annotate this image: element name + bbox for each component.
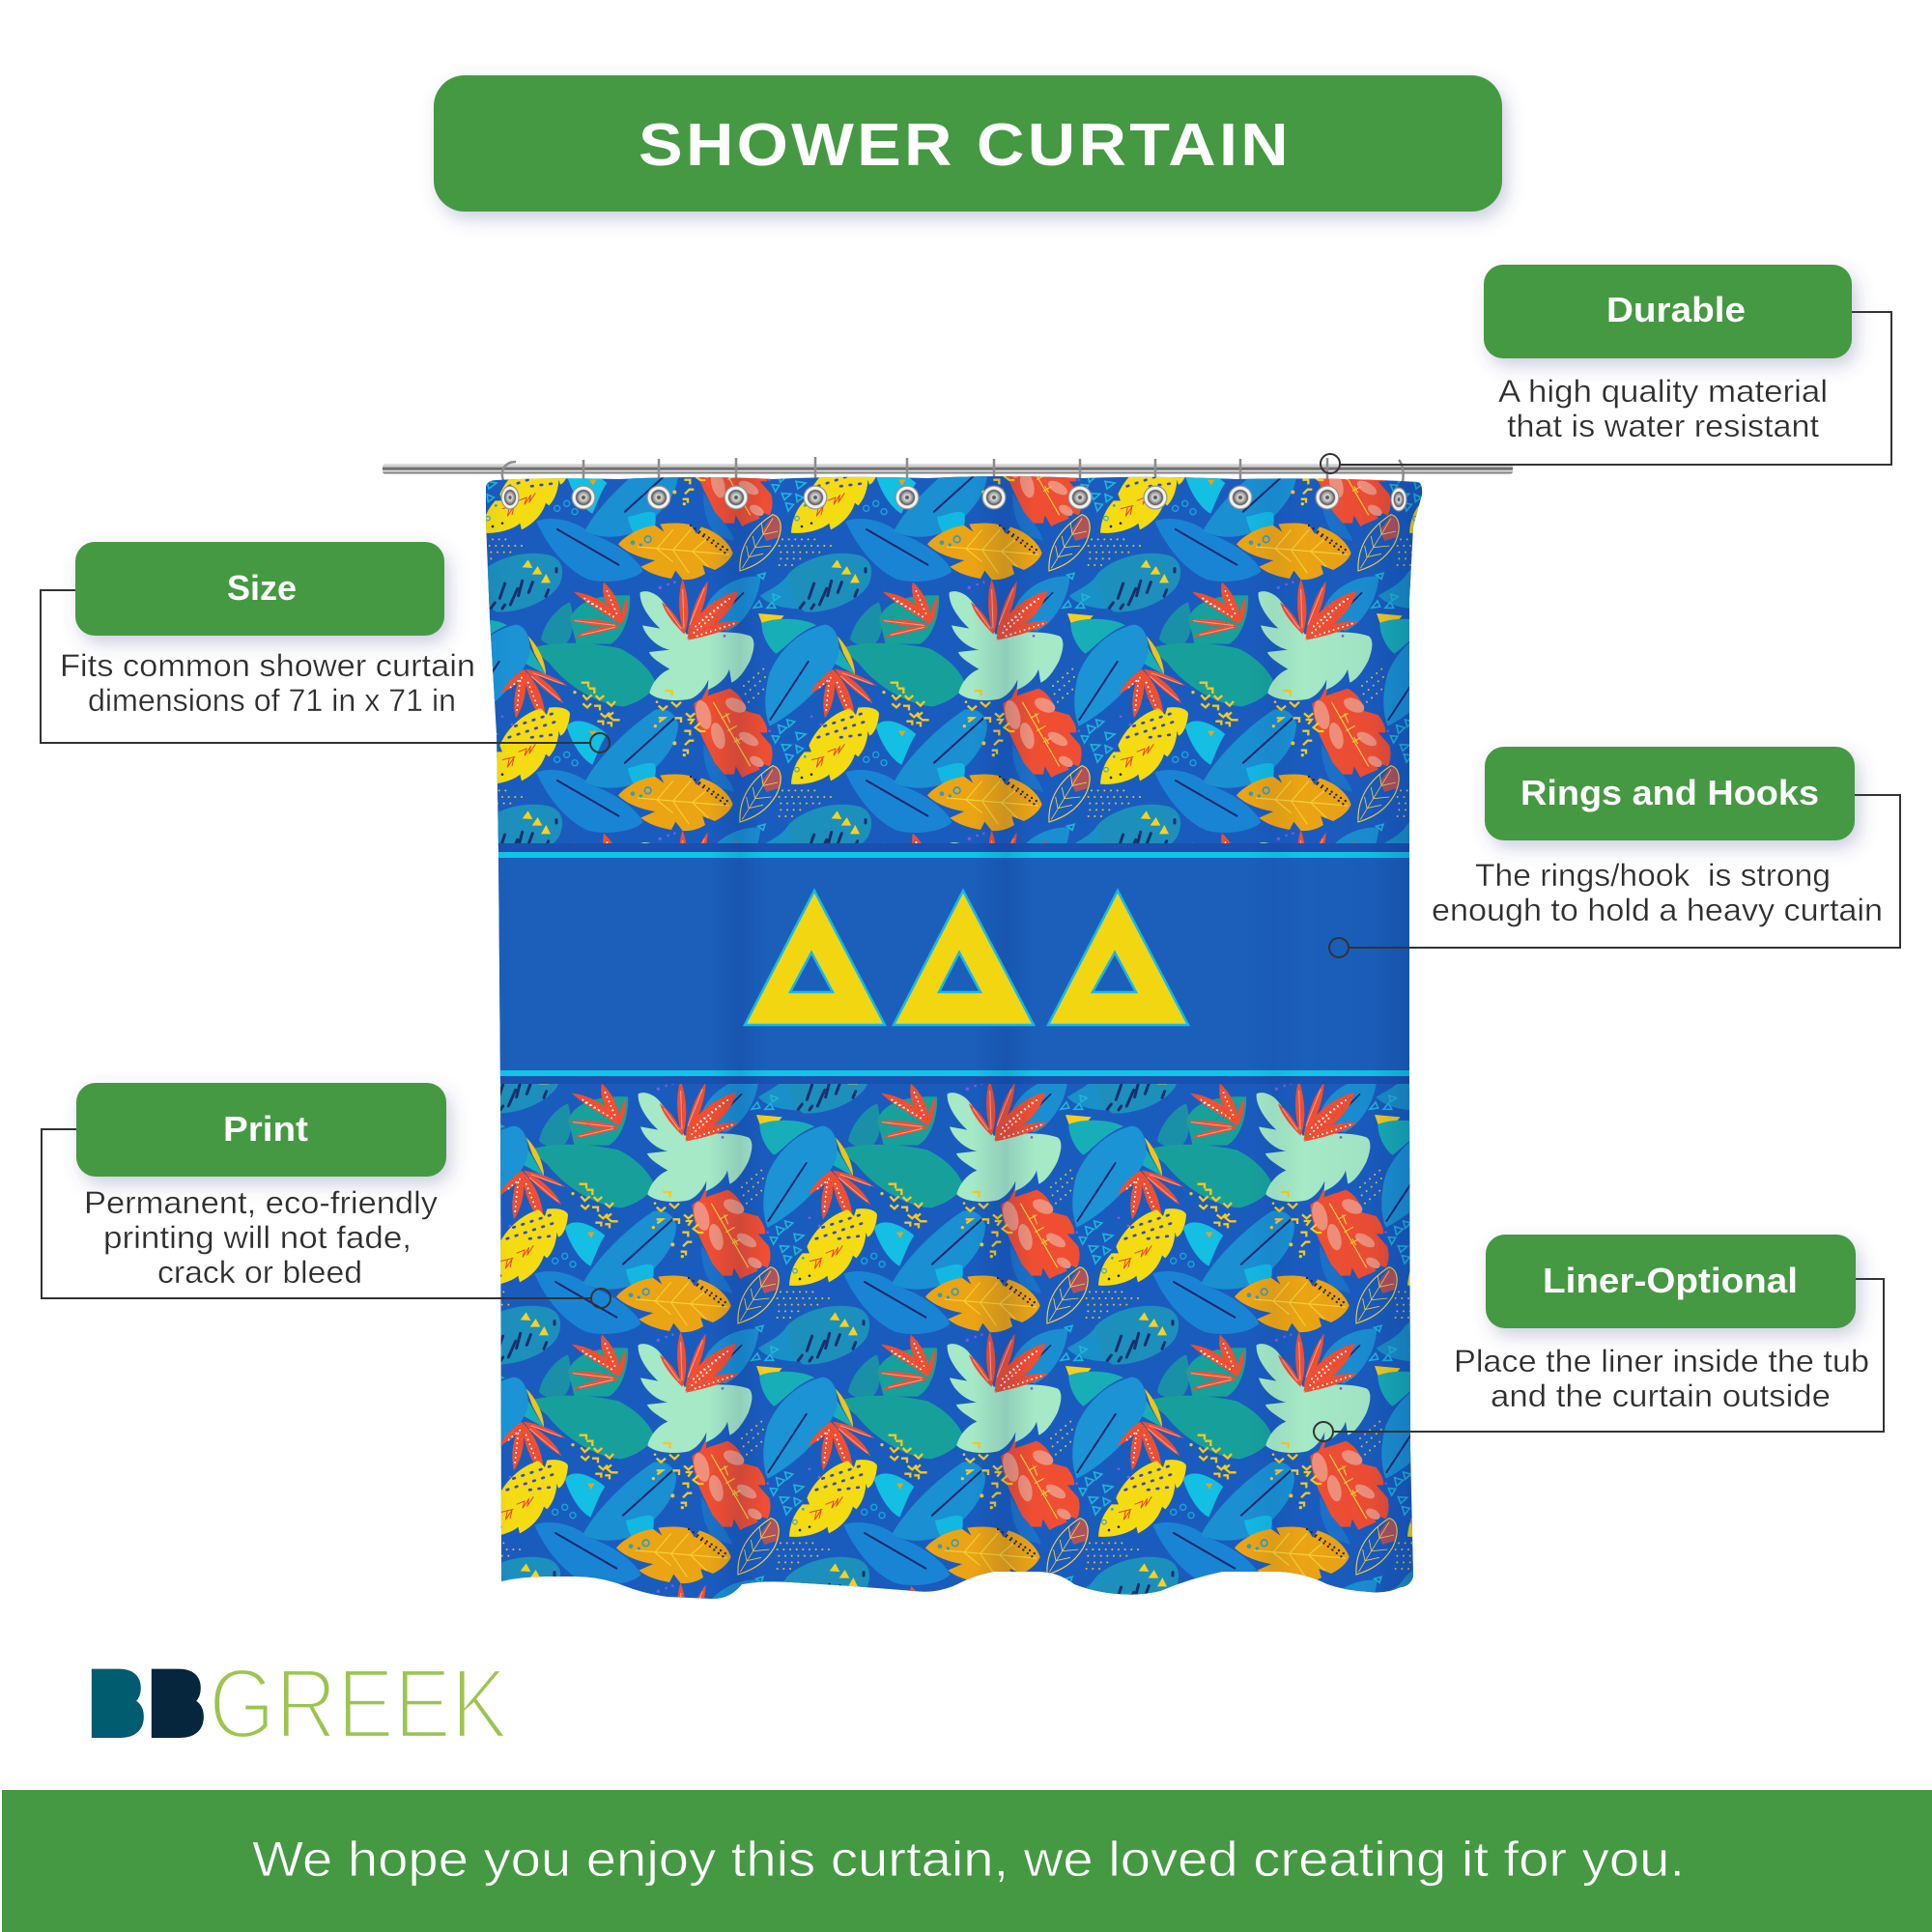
tropical leaf pattern: upper section (486, 476, 1422, 980)
shower curtain (486, 476, 1422, 1599)
callout: durable (1321, 265, 1891, 473)
callout: durable: Durable (1606, 290, 1746, 329)
callout: rings and hooks (1329, 747, 1900, 957)
callout: rings and hooks: The rings/hook is strong (1475, 858, 1831, 893)
callout: size: Size (227, 568, 297, 608)
title banner (434, 75, 1502, 212)
logo: BB Greek (90, 1648, 508, 1759)
curtain hooks (502, 457, 1404, 493)
title banner: SHOWER CURTAIN (639, 112, 1292, 179)
callout: print: printing will not fade, (103, 1220, 412, 1255)
callout: durable: that is water resistant (1507, 409, 1819, 443)
footer bar: We hope you enjoy this curtain, we loved creating it for you. (252, 1832, 1685, 1887)
callout: print (42, 1083, 611, 1308)
callout: liner-optional: and the curtain outside (1491, 1378, 1831, 1413)
callout: print: Permanent, eco-friendly (84, 1185, 438, 1220)
callout: print: crack or bleed (157, 1255, 362, 1290)
callout: size: dimensions of 71 in x 71 in (88, 683, 456, 718)
callout: liner-optional (1314, 1235, 1884, 1441)
callout: durable: A high quality material (1498, 374, 1828, 409)
callout: rings and hooks: Rings and Hooks (1520, 773, 1819, 812)
callout: size (41, 542, 610, 753)
fabric fold shading (486, 476, 1422, 1599)
logo: BB Greek: B (90, 1655, 144, 1753)
callout: print: Print (223, 1109, 308, 1149)
logo: BB Greek: B (150, 1655, 204, 1753)
tropical leaf pattern: lower section (307, 1016, 1604, 1836)
curtain fabric base (486, 476, 1422, 1599)
callout: liner-optional: Place the liner inside the tub (1454, 1344, 1869, 1378)
callout: size: Fits common shower curtain (60, 648, 475, 683)
logo: BB Greek: GREEK (209, 1648, 508, 1759)
curtain rod (383, 464, 1513, 474)
grommets (501, 486, 1406, 511)
callout: rings and hooks: enough to hold a heavy curtain (1432, 893, 1883, 927)
centre band (473, 843, 1430, 1084)
delta delta delta letters (745, 891, 1188, 1025)
callout: liner-optional: Liner-Optional (1543, 1261, 1798, 1300)
footer bar (2, 1790, 1932, 1932)
